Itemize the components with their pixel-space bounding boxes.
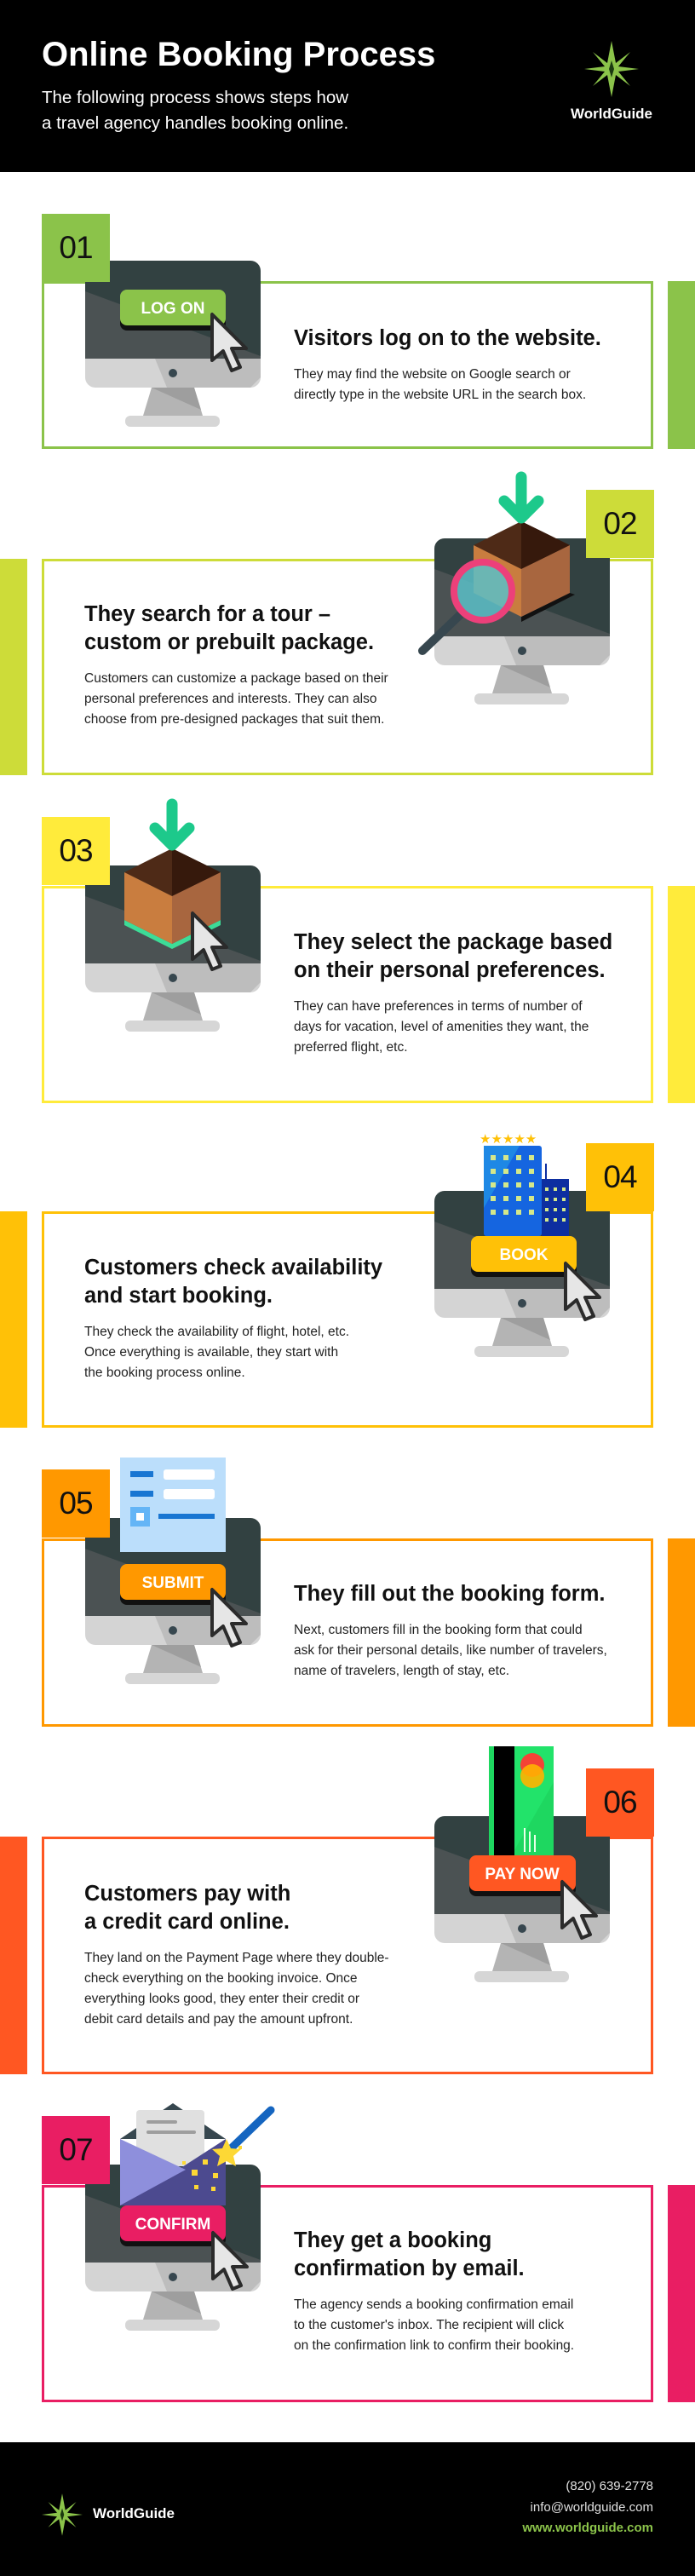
icon: monitor with form and submit: [85, 1458, 261, 1684]
text: step 6: a credit card online.: [84, 1910, 290, 1934]
step number 04: [586, 1143, 654, 1211]
step number 06: 06: [603, 1785, 637, 1820]
panel: step 2 frame: [42, 559, 653, 775]
icon: monitor with email and confirm: CONFIRM: [135, 2216, 210, 2234]
step number 05: 05: [59, 1486, 93, 1521]
text: step 5: ask for their personal details, like number of travelers,: [294, 1643, 607, 1658]
icon: monitor log on: LOG ON: [141, 300, 204, 318]
text: step 2: They search for a tour –: [84, 602, 330, 626]
panel: step 3 frame: [42, 886, 653, 1103]
side bar: [0, 559, 27, 775]
text: step 5: They fill out the booking form.: [294, 1582, 605, 1606]
text: step 6: [84, 1882, 389, 2027]
text: step 3: days for vacation, level of amenities they want, the: [294, 1020, 589, 1034]
text: step 1: Visitors log on to the website.: [294, 326, 601, 350]
logo: [571, 41, 652, 122]
icon: monitor with package and magnifier: [418, 472, 610, 704]
panel: step 7 frame: [42, 2185, 653, 2402]
side bar: [668, 1538, 695, 1727]
text: step 2: choose from pre-designed packages that suit them.: [84, 712, 384, 727]
text: step 2: personal preferences and interests. They can also: [84, 692, 376, 706]
title: Online Booking Process: [42, 36, 435, 73]
step 6: [0, 1746, 654, 2074]
brand name: WorldGuide: [93, 2505, 175, 2521]
text: step 1: [294, 326, 601, 402]
text: step 5: Next, customers fill in the booking form that could: [294, 1623, 583, 1637]
step number 07: [42, 2116, 110, 2184]
text: step 7: They get a booking: [294, 2228, 491, 2252]
text: step 6: debit card details and pay the amount upfront.: [84, 2012, 353, 2027]
step number 04: 04: [603, 1159, 637, 1194]
text: step 4: the booking process online.: [84, 1366, 245, 1380]
step number 07: 07: [59, 2132, 93, 2167]
step number 05: [42, 1469, 110, 1538]
text: step 6: Customers pay with: [84, 1882, 290, 1906]
text: step 6: check everything on the booking invoice. Once: [84, 1971, 358, 1986]
step 1: [42, 214, 695, 449]
side bar: [0, 1211, 27, 1428]
contact info: (820) 639-2778: [566, 2479, 653, 2493]
icon: compass star: [42, 2494, 83, 2535]
text: step 3: They select the package based: [294, 930, 612, 954]
icon: monitor with hotel and book button: BOOK: [499, 1246, 549, 1264]
footer: [0, 2442, 695, 2576]
panel: step 1 frame: [42, 281, 653, 449]
panel: step 6 frame: [42, 1837, 653, 2074]
icon: compass star: [584, 41, 639, 97]
icon: monitor with credit card: [434, 1746, 610, 1982]
brand name: WorldGuide: [571, 106, 652, 122]
text: step 2: custom or prebuilt package.: [84, 630, 374, 654]
text: step 1: They may find the website on Google search or: [294, 367, 571, 382]
text: step 7: on the confirmation link to confirm their booking.: [294, 2338, 574, 2353]
text: step 1: directly type in the website URL in the search box.: [294, 388, 586, 402]
contact info: info@worldguide.com: [531, 2499, 653, 2515]
subtitle: The following process shows steps how: [42, 88, 348, 107]
icon: monitor log on: [85, 261, 261, 427]
icon: monitor with package selected: [85, 799, 261, 1032]
panel: step 5 frame: [42, 1538, 653, 1727]
text: step 4: They check the availability of flight, hotel, etc.: [84, 1325, 349, 1339]
step number 02: [586, 490, 654, 558]
icon: monitor with hotel and book button: [434, 1131, 610, 1357]
step number 02: 02: [603, 506, 637, 541]
text: step 4: and start booking.: [84, 1284, 273, 1308]
text: step 6: They land on the Payment Page where they double-: [84, 1951, 389, 1965]
contact info: www.worldguide.com: [522, 2521, 653, 2535]
subtitle: [42, 88, 349, 133]
step number 03: 03: [59, 833, 93, 868]
step 3: [42, 799, 695, 1103]
contact info: [522, 2479, 653, 2535]
icon: monitor with email and confirm: [85, 2103, 274, 2331]
text: step 5: name of travelers, length of stay, etc.: [294, 1664, 509, 1678]
step 2: [0, 472, 654, 775]
header: [0, 0, 695, 172]
text: step 5: [294, 1582, 607, 1678]
text: step 3: on their personal preferences.: [294, 958, 606, 982]
step 7: [42, 2103, 695, 2402]
text: step 6: everything looks good, they enter their credit or: [84, 1992, 359, 2006]
text: step 7: confirmation by email.: [294, 2257, 525, 2280]
step number 06: [586, 1768, 654, 1837]
text: step 4: Once everything is available, they start with: [84, 1345, 338, 1360]
text: step 7: The agency sends a booking confirmation email: [294, 2297, 573, 2312]
text: step 7: to the customer's inbox. The recipient will click: [294, 2318, 564, 2332]
step 4: ★★★★★: [480, 1131, 537, 1147]
side bar: [668, 886, 695, 1103]
text: step 4: Customers check availability: [84, 1256, 382, 1279]
text: step 7: [294, 2228, 574, 2353]
panel: step 4 frame: [42, 1211, 653, 1428]
text: step 3: They can have preferences in terms of number of: [294, 999, 583, 1014]
text: step 3: preferred flight, etc.: [294, 1040, 408, 1055]
step number 03: [42, 817, 110, 885]
step 5: [42, 1458, 695, 1727]
text: step 4: [84, 1256, 382, 1380]
subtitle: a travel agency handles booking online.: [42, 113, 348, 133]
step number 01: [42, 214, 110, 282]
side bar: [668, 2185, 695, 2402]
side bar: [0, 1837, 27, 2074]
icon: monitor with credit card: PAY NOW: [485, 1866, 560, 1883]
text: step 3: [294, 930, 612, 1055]
footer logo: [42, 2494, 175, 2535]
icon: monitor with form and submit: SUBMIT: [142, 1574, 204, 1592]
side bar: [668, 281, 695, 449]
step number 01: 01: [59, 230, 93, 265]
text: step 2: [84, 602, 388, 727]
text: step 2: Customers can customize a package based on their: [84, 671, 388, 686]
step 4: [0, 1131, 654, 1428]
